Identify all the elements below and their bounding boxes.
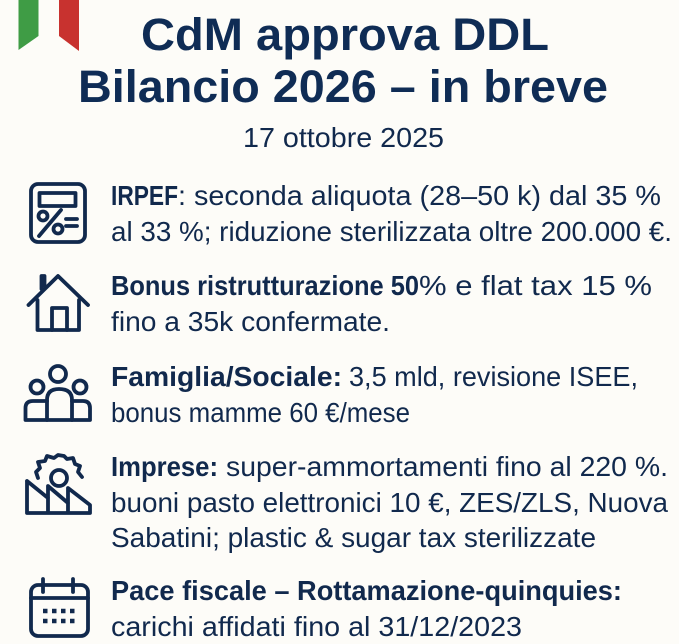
text: Bonus: fino a 35k confermate. (111, 306, 390, 337)
icon: calculator with percent (31, 184, 85, 242)
panel: Pace fiscale (31, 575, 622, 642)
text: Pace fiscale: Pace fiscale – Rottamazione-quinquies: (111, 575, 622, 606)
icon: Italian flag ribbons (18, 0, 79, 51)
text: IRPEF: al 33 %; riduzione sterilizzata oltre 200.000 €. (111, 216, 672, 247)
text: IRPEF (111, 180, 672, 247)
title: CdM approva DDL (141, 9, 549, 60)
icon: calendar (31, 579, 88, 636)
title: Bilancio 2026 – in breve (78, 61, 608, 112)
icon: factory with gear (27, 455, 90, 513)
text: Famiglia (111, 361, 638, 428)
text: Famiglia: Famiglia/Sociale: (111, 361, 342, 392)
panel: Famiglia/Sociale (26, 361, 638, 428)
title (78, 9, 608, 112)
text: Bonus (111, 270, 652, 337)
icon: house (28, 276, 88, 330)
text: Famiglia: bonus mamme 60 €/mese (111, 397, 410, 428)
text: Imprese: Sabatini; plastic & sugar tax sterilizzate (111, 522, 596, 553)
panel: Bonus ristrutturazione (28, 270, 652, 337)
text: IRPEF: IRPEF (111, 180, 178, 211)
text: Bonus: % e flat tax 15 % (419, 270, 652, 301)
panel: IRPEF (31, 180, 672, 247)
text: Pace fiscale: carichi affidati fino al 31/12/2023 (111, 611, 522, 642)
text: IRPEF: : seconda aliquota (28–50 k) dal 35 % (178, 180, 661, 211)
icon: group of people (26, 366, 90, 420)
panel: Imprese (27, 451, 669, 553)
text: Imprese (111, 451, 669, 553)
text: Imprese: Imprese: (111, 451, 218, 482)
text: Famiglia: 3,5 mld, revisione ISEE, (349, 361, 638, 392)
text: Bonus: Bonus ristrutturazione 50 (111, 270, 419, 301)
text: Imprese: buoni pasto elettronici 10 €, ZES/ZLS, Nuova (111, 487, 669, 518)
date: 17 ottobre 2025 (243, 122, 444, 153)
text: Imprese: super-ammortamenti fino al 220 %. (226, 451, 668, 482)
text: Pace fiscale (111, 575, 622, 642)
